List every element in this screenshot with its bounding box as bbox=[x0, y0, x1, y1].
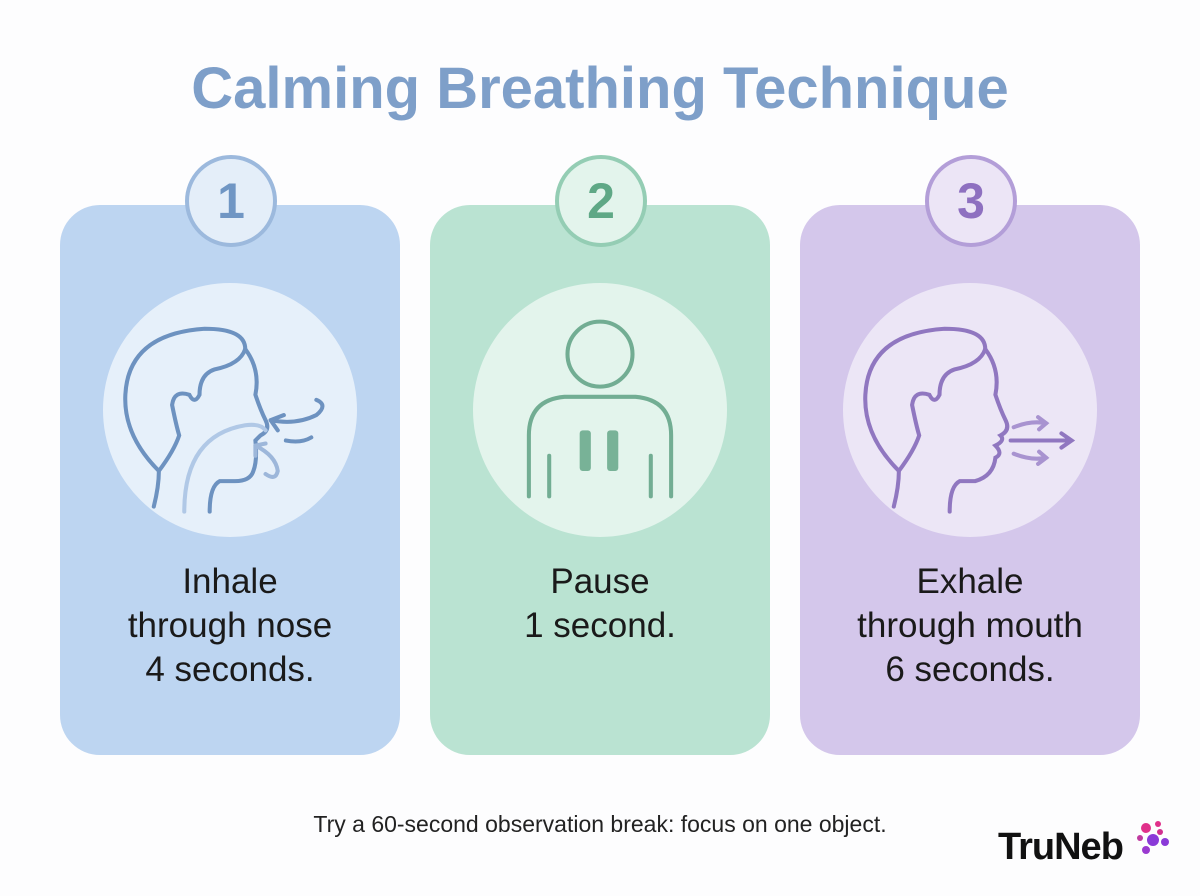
logo: TruNeb bbox=[998, 826, 1123, 868]
badge 1 bbox=[185, 155, 277, 247]
badge 2: 2 bbox=[587, 173, 615, 229]
panel: exhale bbox=[800, 205, 1140, 755]
text bbox=[857, 562, 1083, 689]
badge 3 bbox=[925, 155, 1017, 247]
icon: exhale head bbox=[843, 283, 1097, 537]
text: Pause bbox=[550, 562, 650, 601]
text: Exhale bbox=[916, 562, 1024, 601]
text bbox=[524, 562, 676, 645]
text: 4 seconds. bbox=[145, 650, 315, 689]
text: 1 second. bbox=[524, 606, 676, 645]
text: 6 seconds. bbox=[885, 650, 1055, 689]
text: Inhale bbox=[182, 562, 278, 601]
footer note: Try a 60-second observation break: focus on one object. bbox=[313, 811, 887, 837]
text bbox=[128, 562, 332, 689]
icon: person pause bbox=[473, 283, 727, 537]
badge 2 bbox=[555, 155, 647, 247]
badge 3: 3 bbox=[957, 173, 985, 229]
text: through nose bbox=[128, 606, 332, 645]
panel: pause bbox=[430, 205, 770, 755]
panel: inhale bbox=[60, 205, 400, 755]
badge 1: 1 bbox=[217, 173, 245, 229]
logo bbox=[998, 821, 1169, 868]
icon: inhale head bbox=[103, 283, 357, 537]
text: through mouth bbox=[857, 606, 1083, 645]
title: Calming Breathing Technique bbox=[191, 56, 1009, 121]
